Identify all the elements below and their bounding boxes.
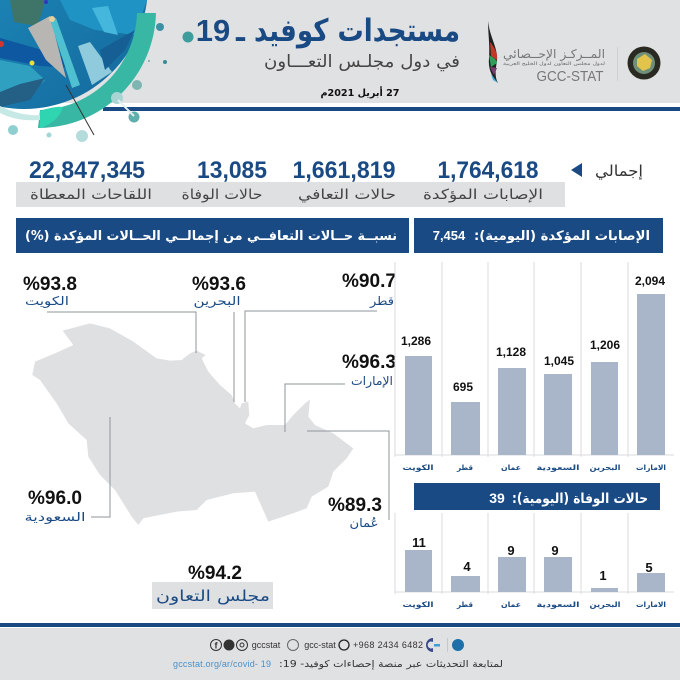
- header band: [0, 0, 680, 111]
- summary: total label and marker: [571, 162, 643, 181]
- logo: GCC-STAT: GCC-STAT: [536, 68, 604, 85]
- map: GCC countries: [32, 323, 353, 525]
- bar: Saudi 9: [536, 543, 580, 609]
- bar: Bahrain 1: البحرين: [590, 600, 620, 609]
- map leader lines: [47, 311, 389, 520]
- title: 19: [196, 13, 230, 48]
- map label: Saudi Arabia: [24, 488, 86, 525]
- bar: Saudi 1045: 1,045: [544, 354, 574, 368]
- bar: Oman 1128: 1,128: [496, 345, 526, 359]
- map label: Qatar: قطر: [369, 294, 394, 309]
- bar: Qatar 695: [451, 380, 480, 472]
- footer contact row: gcc-stat: [304, 640, 336, 650]
- bar: Bahrain 1: 1: [599, 568, 607, 583]
- bar: Oman 1128: عمان: [501, 463, 521, 472]
- stat: deaths: [182, 157, 267, 203]
- banner: daily confirmed heading: 7,454: [433, 228, 466, 243]
- map label: UAE: الإمارات: [351, 374, 393, 389]
- bar: Kuwait 11: الكويت: [402, 600, 434, 609]
- summary: total label and marker: إجمالي: [595, 162, 643, 181]
- map label: Bahrain: البحرين: [194, 294, 240, 309]
- stat: confirmed cases: الإصابات المؤكدة: [423, 187, 543, 203]
- bar: Qatar 4: [451, 559, 480, 609]
- footer link row: gccstat.org/ar/covid- 19: [173, 659, 271, 669]
- bar: Saudi 9: 9: [551, 543, 559, 558]
- footer contact row: [210, 638, 464, 652]
- bar: Kuwait 11: [402, 535, 434, 609]
- bar: Qatar 695: قطر: [456, 463, 473, 472]
- stat: recoveries: 1,661,819: [292, 157, 396, 184]
- header illustration: virus and science collage: [0, 0, 167, 142]
- bar: UAE 2094: [635, 274, 666, 472]
- title: مستجدات كوفيد ـ: [235, 13, 460, 49]
- bar: Saudi 1045: [536, 354, 580, 472]
- footer link row: لمتابعة التحديثات عبر منصة إحصاءات كوفيد- 19:: [279, 659, 503, 670]
- stat: confirmed cases: [423, 157, 543, 203]
- map label: Kuwait: [23, 274, 77, 309]
- map label: Bahrain: [192, 274, 246, 309]
- bar: UAE 2094: الامارات: [636, 463, 666, 472]
- bar: UAE 2094: 2,094: [635, 274, 665, 288]
- banner: daily deaths heading: 39: [489, 490, 505, 506]
- GCC total: [152, 563, 273, 609]
- bar: Qatar 695: 695: [453, 380, 473, 394]
- stat: vaccines: اللقاحات المعطاة: [30, 187, 152, 203]
- logo: GCC-STAT: لدول مجلس التعاون لدول الخليج العربية: [503, 62, 605, 67]
- map label: Bahrain: %93.6: [192, 274, 246, 295]
- bar: Kuwait 1286: [401, 334, 434, 472]
- stat: recoveries: [292, 157, 396, 203]
- banner: daily deaths heading: [414, 483, 660, 510]
- logo: GCC emblem: [628, 46, 660, 80]
- bar chart: daily confirmed cases: [395, 262, 674, 472]
- banner: recovery ratio heading: نسبــة حــالات التعافــي من إجمالــي الحــالات المؤكدة (%): [25, 229, 397, 244]
- bar: Qatar 4: قطر: [456, 600, 473, 609]
- map label: UAE: %96.3: [342, 352, 396, 373]
- footer band: [0, 623, 680, 680]
- GCC total: %94.2: [188, 563, 242, 584]
- stat: deaths: حالات الوفاة: [182, 187, 262, 203]
- date: 27 أبريل 2021م: [320, 86, 400, 99]
- bar: UAE 5: 5: [645, 560, 653, 575]
- bar: Bahrain 1: [590, 568, 620, 609]
- map label: Saudi Arabia: %96.0: [28, 488, 82, 509]
- map label: Qatar: %90.7: [342, 271, 396, 292]
- bar: Saudi 9: السعودية: [536, 600, 580, 609]
- map label: Saudi Arabia: السعودية: [24, 510, 86, 525]
- map label: Oman: [328, 495, 382, 530]
- bar: Qatar 4: 4: [463, 559, 471, 574]
- bar: Oman 1128: [496, 345, 526, 472]
- logo: GCC-STAT: [488, 21, 618, 85]
- footer contact row: +968 2434 6482: [353, 640, 423, 650]
- banner: daily deaths heading: حالات الوفاة (اليومية):: [512, 491, 648, 507]
- banner: recovery ratio heading: [16, 218, 409, 253]
- stat: vaccines: 22,847,345: [29, 157, 145, 184]
- banner: daily confirmed heading: [414, 218, 663, 253]
- map label: Oman: عُمان: [350, 516, 378, 530]
- bar: Bahrain 1206: 1,206: [590, 338, 620, 352]
- map label: Kuwait: الكويت: [25, 294, 69, 309]
- bar: Kuwait 1286: الكويت: [402, 463, 434, 472]
- stat: confirmed cases: 1,764,618: [438, 157, 538, 184]
- bar: Kuwait 1286: 1,286: [401, 334, 431, 348]
- bar: Saudi 1045: السعودية: [536, 463, 580, 472]
- stat: recoveries: حالات التعافي: [298, 187, 396, 203]
- stat: vaccines: [29, 157, 152, 203]
- footer contact row: f: [214, 640, 218, 650]
- summary label band: [16, 182, 565, 207]
- map label: Oman: %89.3: [328, 495, 382, 516]
- map label: Kuwait: %93.8: [23, 274, 77, 295]
- logo: GCC-STAT: المــركـز الإحــصائي: [503, 47, 605, 62]
- bar: UAE 5: [636, 560, 666, 609]
- map label: Qatar: [342, 271, 396, 309]
- map label: UAE: [342, 352, 396, 389]
- bar chart: daily deaths: [395, 513, 674, 609]
- bar: Bahrain 1206: [590, 338, 620, 472]
- subtitle: في دول مجلـس التعـــاون: [264, 52, 460, 72]
- footer contact row: gccstat: [252, 640, 281, 650]
- bar: UAE 5: الامارات: [636, 600, 666, 609]
- bar: Bahrain 1206: البحرين: [590, 463, 620, 472]
- bar: Kuwait 11: 11: [412, 535, 426, 550]
- footer link row: [173, 659, 503, 670]
- bar: Oman 9: 9: [507, 543, 515, 558]
- stat: deaths: 13,085: [197, 157, 267, 184]
- bar: Oman 9: [498, 543, 526, 609]
- GCC total: مجلس التعاون: [156, 587, 270, 605]
- bar: Oman 9: عمان: [501, 600, 521, 609]
- banner: daily confirmed heading: الإصابات المؤكدة (اليومية):: [474, 229, 650, 244]
